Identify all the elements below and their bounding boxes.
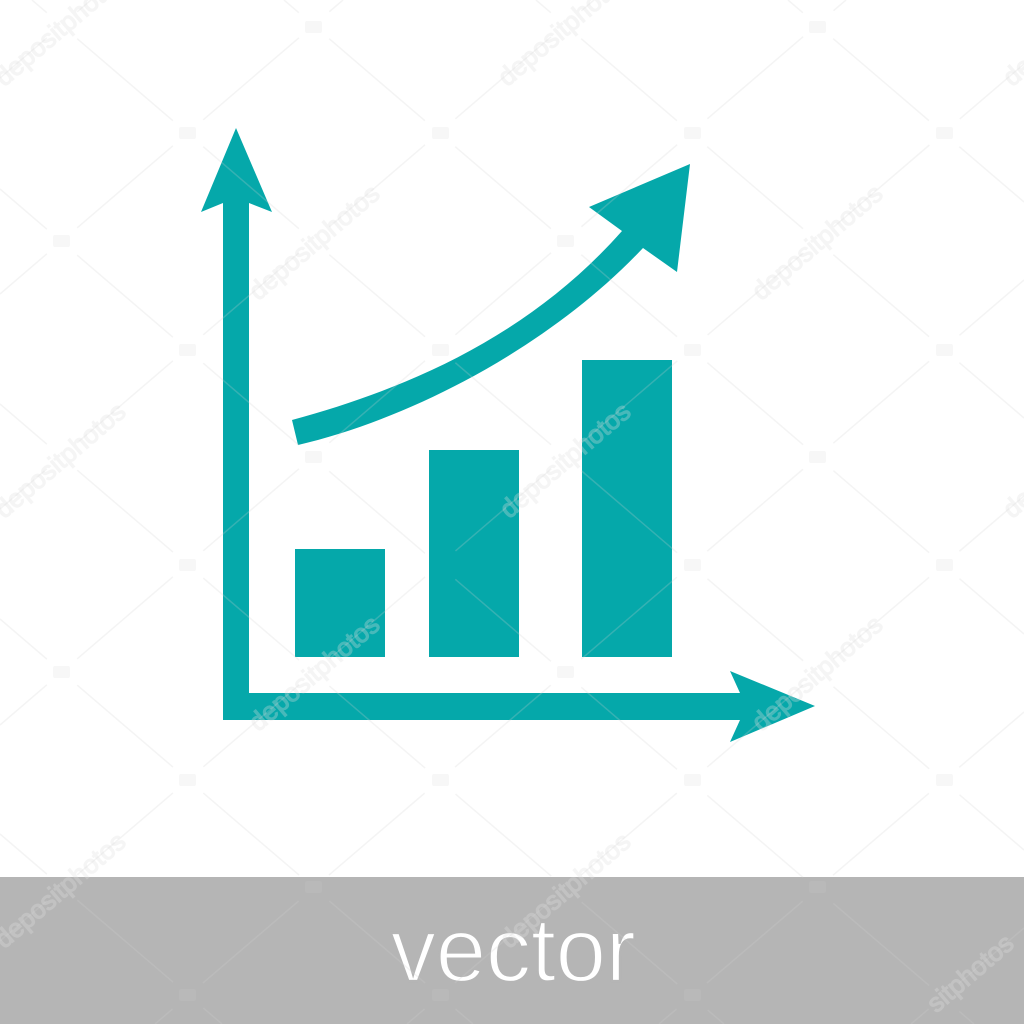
chart icon xyxy=(201,128,815,742)
growth arrow xyxy=(292,164,690,445)
watermark texts: sitphotos xyxy=(921,928,1019,1018)
watermark texts: depositphotos xyxy=(243,178,385,306)
footer band xyxy=(0,877,1024,1024)
footer label: vector xyxy=(391,900,635,1001)
watermark texts: depositphotos xyxy=(746,178,888,306)
bar 1 xyxy=(295,549,385,657)
watermark texts: depositphotos xyxy=(494,396,636,524)
bar 3 xyxy=(582,360,672,657)
bar 2 xyxy=(429,450,519,657)
axes with arrowheads xyxy=(201,128,815,742)
watermark texts: depositphotos xyxy=(243,609,385,737)
watermark texts: depositphotos xyxy=(746,609,888,737)
watermark texts: depositphotos xyxy=(494,826,636,954)
